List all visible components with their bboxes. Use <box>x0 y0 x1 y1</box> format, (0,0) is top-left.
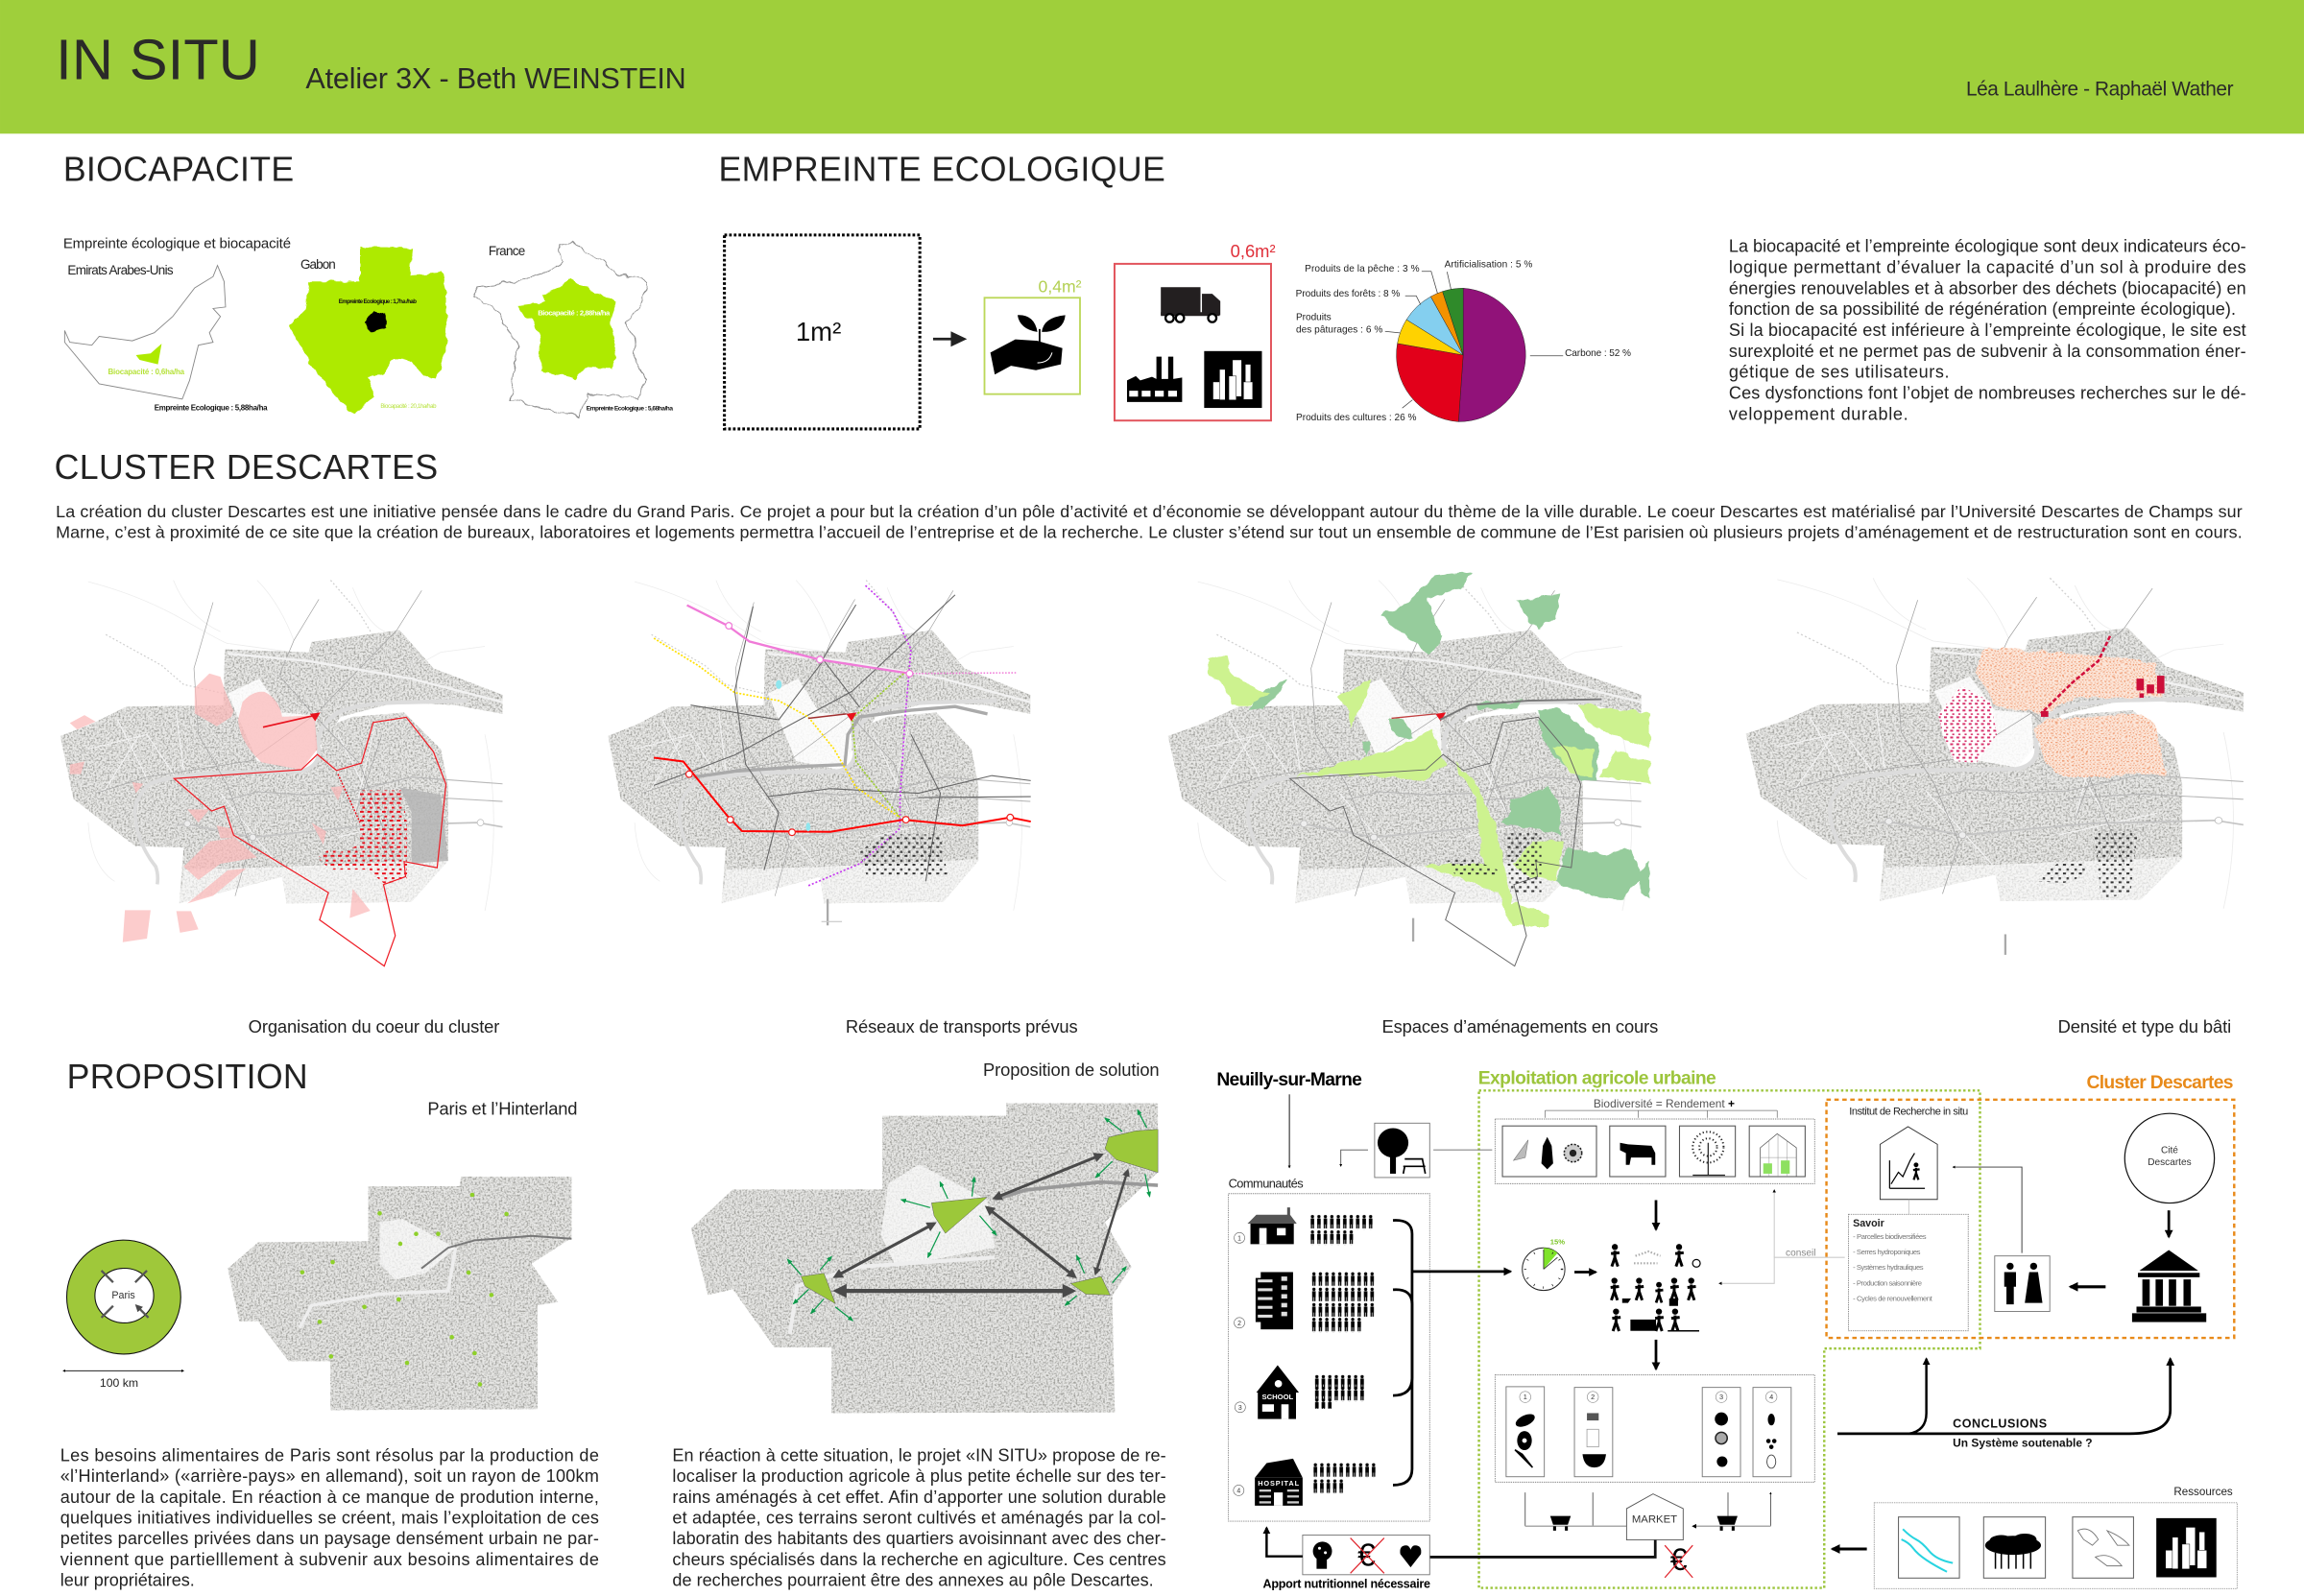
map: Emirats: Empreinte Ecologique : 5,88ha/ha <box>155 404 268 413</box>
captions for maps: Organisation du coeur du cluster <box>249 1016 499 1036</box>
captions for maps: Réseaux de transports prévus <box>846 1016 1078 1036</box>
icon: truck, factory and city box <box>1115 241 1276 420</box>
icon: hand and sprout box: 0,4m² <box>1039 277 1082 297</box>
text block: biocapacity explanation <box>1729 237 2246 423</box>
panel: communautes: Communautés <box>1229 1176 1304 1190</box>
pie chart: des pâturages : 6 % <box>1296 325 1382 336</box>
heading: proposition: PROPOSITION <box>67 1058 308 1096</box>
map: Paris hinterland with dots <box>228 1177 571 1410</box>
header band: Léa Laulhère - Raphaël Wather <box>1966 78 2234 100</box>
heading: biocapacite: BIOCAPACITE <box>63 150 294 188</box>
Neuilly heading and arrow: Neuilly-sur-Marne <box>1216 1070 1362 1090</box>
boundary: cluster descartes <box>1827 1073 2234 1338</box>
panel: biocapacity maps: Empreinte écologique et biocapacité <box>63 235 291 251</box>
icon: hospital: HOSPITAL <box>1258 1479 1300 1488</box>
Cite Descartes circle: Cité <box>2161 1146 2178 1156</box>
conseil link <box>1719 1190 1845 1283</box>
icon: hand and sprout box <box>985 277 1082 394</box>
panel: biodiversity production: Biodiversité = Rendement + <box>1594 1097 1735 1110</box>
text block: projet in situ: de recherches pourraient être des annexes au pôle Descartes. <box>672 1570 1154 1589</box>
text block: biocapacity explanation: Si la biocapacité est inférieure à l’empreinte écologique, le site est <box>1729 321 2246 340</box>
market building: MARKET <box>1632 1513 1677 1525</box>
map: Gabon: Gabon <box>300 257 336 272</box>
text block: projet in situ: laboratin des habitants des quartiers avoisinnant avec des cher- <box>672 1529 1166 1548</box>
map: France: France <box>489 244 525 258</box>
Cite Descartes circle: Descartes <box>2148 1157 2192 1168</box>
icon: city <box>2156 1518 2217 1577</box>
icon: couple box <box>1953 1167 2050 1312</box>
icon: greenhouse <box>1761 1133 1796 1177</box>
text block: besoins alimentaires: «l’Hinterland» («arrière-pays» en allemand), soit un rayon de 100km <box>60 1466 599 1486</box>
people pictograms <box>1309 1215 1377 1494</box>
captions for maps: Espaces d’aménagements en cours <box>1382 1016 1658 1036</box>
panel: ecological footprint squares <box>725 235 1631 429</box>
panel: produce: 2 <box>1591 1393 1595 1401</box>
panel: communautes: 3 <box>1238 1405 1242 1412</box>
boundary: exploitation agricole: Exploitation agricole urbaine <box>1478 1069 1716 1089</box>
Cite Descartes circle <box>2124 1113 2215 1237</box>
text block: besoins alimentaires: leur propriétaires. <box>60 1570 195 1589</box>
heading: empreinte ecologique: EMPREINTE ECOLOGIQUE <box>718 150 1165 188</box>
pie chart: Produits des forêts : 8 % <box>1296 289 1400 299</box>
panel: ressources <box>1833 1486 2237 1588</box>
systems diagram <box>1216 1069 2237 1591</box>
pie chart: Produits <box>1296 312 1332 322</box>
panel: biocapacity maps <box>63 235 673 417</box>
pie chart <box>1296 260 1631 423</box>
panel: produce <box>1495 1375 1814 1482</box>
text block: biocapacity explanation: gétique de ses utilisateurs. <box>1729 363 1950 382</box>
icon: clock with 15 percent: 15% <box>1550 1237 1565 1246</box>
pie chart: Produits de la pêche : 3 % <box>1305 264 1420 274</box>
text block: biocapacity explanation: Ces dysfonctions font l’objet de nombreuses recherches sur le dé- <box>1729 383 2246 402</box>
icon: crossed euro <box>1351 1538 1384 1574</box>
text block: cluster intro: La création du cluster Descartes est une initiative pensée dans le cadre du Grand Paris. Ce projet a pour but la création d’un pôle d’activité et d’économie se développant autour du thème de la ville durable. Le coeur Descartes est matérialisé par l’Université Descartes de Champs sur <box>56 502 2243 521</box>
text block: besoins alimentaires: Les besoins alimentaires de Paris sont résolus par la production de <box>60 1445 599 1465</box>
text block: besoins alimentaires <box>60 1445 599 1589</box>
map: France: Biocapacité : 2,88ha/ha <box>538 308 611 317</box>
1 m2 dotted square: 1m² <box>796 317 841 346</box>
icons: food <box>1514 1412 1777 1468</box>
text block: besoins alimentaires: viennent que partielllement à subvenir aux besoins alimentaires de <box>60 1550 599 1569</box>
icon: hospital <box>1255 1459 1303 1506</box>
diagram: Paris ring: Paris <box>111 1290 135 1301</box>
icon: forest <box>1985 1534 2041 1569</box>
icon: tree and bench box <box>1341 1123 1492 1178</box>
pie chart: Artificialisation : 5 % <box>1445 260 1532 271</box>
label: Proposition de solution: Proposition de solution <box>983 1060 1160 1080</box>
brackets and main arrow <box>1393 1221 1510 1485</box>
conclusions arrows <box>1837 1359 2171 1450</box>
map: France <box>474 242 673 417</box>
icon: tower <box>1256 1273 1293 1329</box>
map: Gabon: Empreinte Ecologique : 1,7ha /hab <box>339 298 417 305</box>
text block: projet in situ: En réaction à cette situation, le projet «IN SITU» propose de re- <box>672 1445 1166 1465</box>
text block: projet in situ: et adaptée, ces terrains seront cultivés et aménagés par la col- <box>672 1508 1166 1527</box>
savoir list: - Systèmes hydrauliques <box>1853 1263 1924 1272</box>
panel: communautes <box>1229 1176 1429 1521</box>
savoir list <box>1849 1214 1968 1331</box>
map: Gabon: Biocapacité : 20,1ha/hab <box>380 403 437 410</box>
1 m2 dotted square <box>725 235 920 429</box>
text block: cluster intro <box>56 502 2243 542</box>
icon: animals <box>2077 1529 2129 1566</box>
map: reseaux de transports <box>608 573 1119 925</box>
panel: produce: 4 <box>1769 1393 1773 1401</box>
icon: clock with 15 percent <box>1523 1237 1565 1291</box>
panel: biodiversity production <box>1495 1097 1814 1183</box>
conseil link: conseil <box>1786 1249 1815 1259</box>
map: Gabon <box>289 247 446 415</box>
text block: biocapacity explanation: La biocapacité et l’empreinte écologique sont deux indicateurs éco- <box>1729 237 2246 256</box>
text block: projet in situ: cheurs spécialisés dans la recherche en agiculture. Ces centres <box>672 1550 1166 1569</box>
savoir list: - Production saisonnière <box>1853 1278 1922 1287</box>
captions for maps: Densité et type du bâti <box>2058 1016 2231 1036</box>
conclusions arrows: CONCLUSIONS <box>1953 1417 2047 1431</box>
text block: biocapacity explanation: logique permettant d’évaluer la capacité d’un sol à produire des <box>1729 258 2246 277</box>
icon: university <box>2132 1251 2206 1322</box>
header band: Atelier 3X - Beth WEINSTEIN <box>305 62 686 95</box>
savoir list: Savoir <box>1853 1218 1884 1229</box>
icon: truck, factory and city box: 0,6m² <box>1231 241 1276 261</box>
pie chart: Produits des cultures : 26 % <box>1296 413 1417 423</box>
market building <box>1626 1494 1683 1540</box>
text block: projet in situ: rains aménagés à cet effet. Afin d’apporter une solution durable <box>672 1488 1166 1507</box>
captions for maps <box>249 1016 2231 1036</box>
boundary: cluster descartes: Cluster Descartes <box>2086 1073 2234 1093</box>
panel: ressources: Ressources <box>2173 1486 2233 1498</box>
map: Emirats <box>64 263 268 413</box>
icon: orchard tree <box>1692 1131 1725 1175</box>
map: France: Empreinte Ecologique : 5,68ha/ha <box>587 406 673 413</box>
market and distribution <box>1525 1492 1770 1540</box>
panel: produce: 3 <box>1719 1393 1723 1401</box>
conclusions arrows: Un Système soutenable ? <box>1953 1437 2093 1450</box>
arrow <box>933 333 964 345</box>
icon: school: SCHOOL <box>1262 1393 1294 1401</box>
icon: house <box>1247 1207 1297 1244</box>
header band <box>0 0 2304 133</box>
label: Paris et l'Hinterland: Paris et l’Hinterland <box>427 1099 578 1119</box>
text block: projet in situ: localiser la production agricole à plus petite échelle sur des ter- <box>672 1466 1166 1486</box>
savoir list: - Serres hydroponiques <box>1853 1248 1921 1256</box>
savoir list: - Parcelles biodiversifiées <box>1853 1232 1927 1241</box>
panel: communautes: 1 <box>1237 1235 1241 1242</box>
money flow and nutrition <box>1263 1528 1692 1591</box>
money flow and nutrition: € <box>1670 1542 1688 1577</box>
diagram: Paris ring: 100 km <box>100 1376 138 1390</box>
map: espaces d'amenagements <box>1168 565 1693 966</box>
icon: cow <box>1620 1143 1655 1165</box>
icon: heart <box>1400 1545 1421 1567</box>
icon: crops <box>1514 1137 1582 1169</box>
text block: biocapacity explanation: surexploité et ne permet pas de subvenir à la consommation éner- <box>1729 342 2246 361</box>
text block: biocapacity explanation: fonction de sa possibilité de régénération (empreinte écologique). <box>1729 299 2236 319</box>
text block: besoins alimentaires: autour de la capitale. En réaction à ce manque de prodution interne, <box>60 1488 599 1507</box>
arrow: university to people <box>2071 1286 2105 1288</box>
icon: head <box>1313 1541 1332 1569</box>
text block: biocapacity explanation: énergies renouvelables et à absorber des déchets (biocapacité) en <box>1729 278 2246 298</box>
heading: cluster descartes: CLUSTER DESCARTES <box>55 448 438 487</box>
panel: produce: 1 <box>1524 1393 1527 1401</box>
text block: cluster intro: Marne, c’est à proximité de ce site que la création de bureaux, laboratoires et logements permettra l’accueil de l’entreprise et de la recherche. Le cluster s’étend sur tout un ensemble de commune de l’Est parisien où plusieurs projets d’aménagement et de restructuration sont en cours. <box>56 523 2243 542</box>
pie chart: Carbone : 52 % <box>1565 348 1631 359</box>
map: proposed solution network <box>691 1103 1158 1413</box>
map: densite et type du bati <box>1746 578 2244 955</box>
text block: besoins alimentaires: quelques initiatives individuelles se créent, mais l’exploitation de ces <box>60 1508 599 1527</box>
map: organisation du coeur du cluster <box>60 581 502 966</box>
text block: biocapacity explanation: veloppement durable. <box>1729 404 1908 423</box>
icon: water <box>1902 1529 1953 1572</box>
money flow and nutrition: Apport nutritionnel nécessaire <box>1263 1578 1430 1591</box>
savoir list: - Cycles de renouvellement <box>1853 1294 1933 1302</box>
boundary: exploitation agricole <box>1478 1069 1980 1588</box>
text block: projet in situ <box>672 1445 1166 1589</box>
process arrows <box>1574 1201 1656 1370</box>
map: Emirats: Emirats Arabes-Unis <box>67 263 174 277</box>
icon: school <box>1257 1366 1299 1419</box>
icon: crossed euro: € <box>1357 1538 1376 1574</box>
map: Emirats: Biocapacité : 0,6ha/ha <box>108 368 185 376</box>
panel: communautes: 2 <box>1237 1321 1241 1327</box>
panel: institut de recherche <box>1719 1107 1968 1331</box>
panel: institut de recherche: Institut de Recherche in situ <box>1849 1107 1968 1118</box>
text block: besoins alimentaires: petites parcelles privées dans un paysage densément urbain ne par- <box>60 1529 599 1548</box>
panel: communautes: 4 <box>1236 1489 1240 1495</box>
icon: workers <box>1611 1244 1700 1331</box>
header band: IN SITU <box>56 28 260 92</box>
diagram: Paris ring <box>63 1240 183 1390</box>
